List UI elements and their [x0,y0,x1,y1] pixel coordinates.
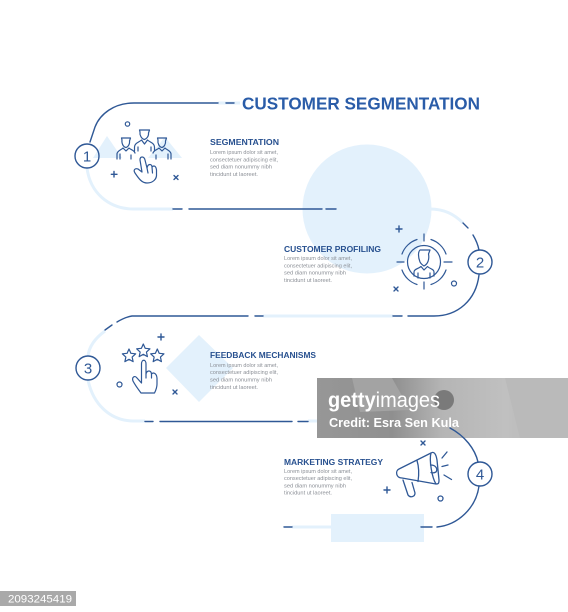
image id tag: 2093245419 [8,594,72,606]
text block: segmentation: Lorem ipsum dolor sit amet, [210,150,278,156]
decorative shape: diamond [166,335,233,402]
icon: megaphone [384,441,452,501]
text block: feedback mechanisms: Lorem ipsum dolor sit amet, [210,363,278,369]
timeline path [87,0,484,527]
title: CUSTOMER SEGMENTATION [242,94,480,114]
text block: customer profiling: sed diam nonummy nibh [284,270,346,276]
text block: customer profiling: consectetuer adipiscing elit, [284,264,352,270]
text block: segmentation: sed diam nonummy nibh [210,164,272,170]
icon: stars and hand [117,334,177,394]
text block: feedback mechanisms: consectetuer adipiscing elit, [210,370,278,376]
text block: feedback mechanisms: tincidunt ut laoreet. [210,385,258,391]
watermark banner: gettyimages [328,389,440,412]
text block: segmentation: tincidunt ut laoreet. [210,172,258,178]
text block: marketing strategy [284,458,384,496]
arc continuation over watermark [450,428,478,462]
step 1 number: 1 [83,148,91,166]
text block: feedback mechanisms [210,351,317,391]
text block: feedback mechanisms: FEEDBACK MECHANISMS [210,351,317,360]
text block: feedback mechanisms: sed diam nonummy nibh [210,378,272,384]
step 2 number: 2 [476,254,484,272]
text block: customer profiling: tincidunt ut laoreet. [284,278,332,284]
icon: people with pointing hand [111,122,178,183]
icon: person in target [394,226,456,291]
text block: segmentation: consectetuer adipiscing elit, [210,158,278,164]
text block: marketing strategy: consectetuer adipiscing elit, [284,476,352,482]
step 3 number: 3 [84,360,92,378]
decorative shape: triangles behind people icon [93,136,182,158]
text block: marketing strategy: Lorem ipsum dolor sit amet, [284,469,352,475]
text block: segmentation [210,138,279,178]
watermark banner: Credit: Esra Sen Kula [329,415,460,430]
text block: marketing strategy: tincidunt ut laoreet. [284,490,332,496]
step 3 number [76,356,100,380]
step 2 number [468,250,492,274]
decorative shape: large circle [302,144,432,274]
step 4 number [468,462,492,486]
text block: customer profiling: Lorem ipsum dolor sit amet, [284,256,352,262]
decorative shape: rectangle [331,514,424,542]
watermark banner [317,378,568,438]
text block: customer profiling: CUSTOMER PROFILING [284,245,381,254]
image id tag [0,591,76,606]
step 1 number [75,144,99,168]
text block: marketing strategy: sed diam nonummy nibh [284,484,346,490]
step 4 number: 4 [476,466,484,484]
text block: customer profiling [284,245,381,284]
text block: marketing strategy: MARKETING STRATEGY [284,458,384,467]
text block: segmentation: SEGMENTATION [210,138,279,147]
